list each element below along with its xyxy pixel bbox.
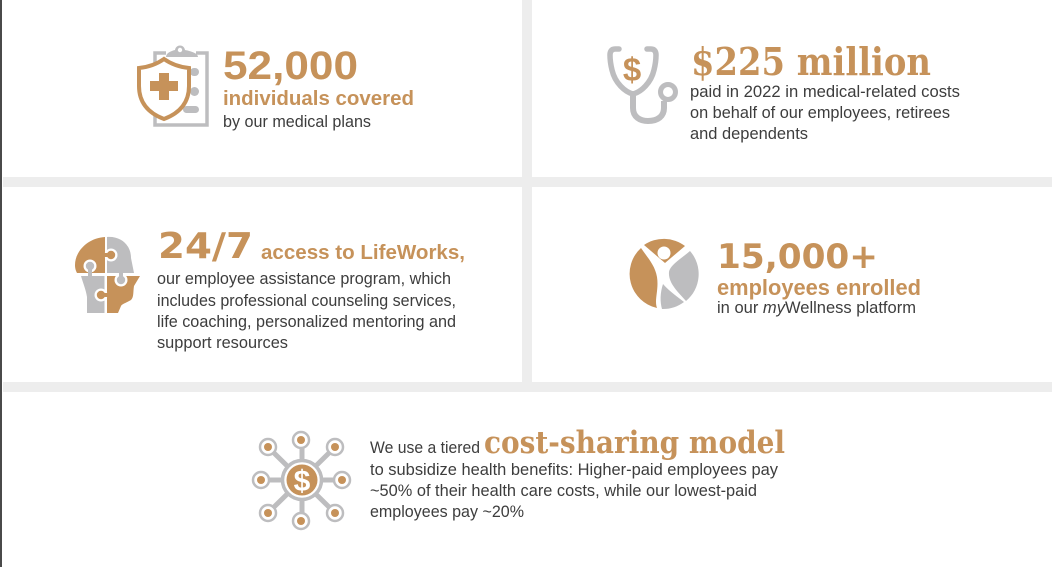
label: individuals covered: individuals covered [223,88,414,110]
label: employees enrolled: employees enrolled [717,275,921,300]
text: paid description [690,83,960,143]
text: program description: our employee assistance program, which [157,270,451,288]
panel: medical costs paid [610,39,960,143]
panel: cost-sharing model [253,425,785,529]
text: program description [157,270,456,352]
text: by our medical plans: by our medical plans [223,113,371,131]
icon: dollar network [253,432,350,529]
text: in our myWellness platform: in our myWellness platform [717,299,916,317]
text: subsidy description [370,461,779,521]
icon: shield and clipboard [139,46,207,125]
icon: stethoscope with dollar sign [610,49,676,121]
label: access to LifeWorks: access to LifeWorks, [261,242,465,264]
heading: cost-sharing model: cost-sharing model [484,425,785,461]
icon: stethoscope with dollar sign: $ [623,51,641,88]
stat: 52,000: 52,000 [223,44,358,88]
text: subsidy description: to subsidize health benefits: Higher-paid employees pay [370,461,779,479]
panel: LifeWorks access [75,226,465,352]
text: subsidy description: employees pay ~20% [370,503,524,521]
text: paid description: and dependents [690,125,808,143]
text: paid description: on behalf of our employees, retirees [690,104,950,122]
stat: $225 million: $225 million [691,39,931,84]
icon: wellness figure circle [630,239,699,309]
panel: individuals covered [139,44,414,131]
text: subsidy description: ~50% of their health care costs, while our lowest-paid [370,482,757,500]
icon: dollar network: $ [294,465,311,498]
text: paid description: paid in 2022 in medical-related costs [690,83,960,101]
stat: 15,000+: 15,000+ [717,237,878,277]
text: program description: support resources [157,334,288,352]
text: program description: includes professional counseling services, [157,292,456,310]
text: we use a tiered: We use a tiered [370,439,480,457]
text: program description: life coaching, personalized mentoring and [157,313,456,331]
stat: 24/7: 24/7 [158,226,253,267]
icon: puzzle head [75,237,140,313]
panel: myWellness enrollment [630,237,921,317]
